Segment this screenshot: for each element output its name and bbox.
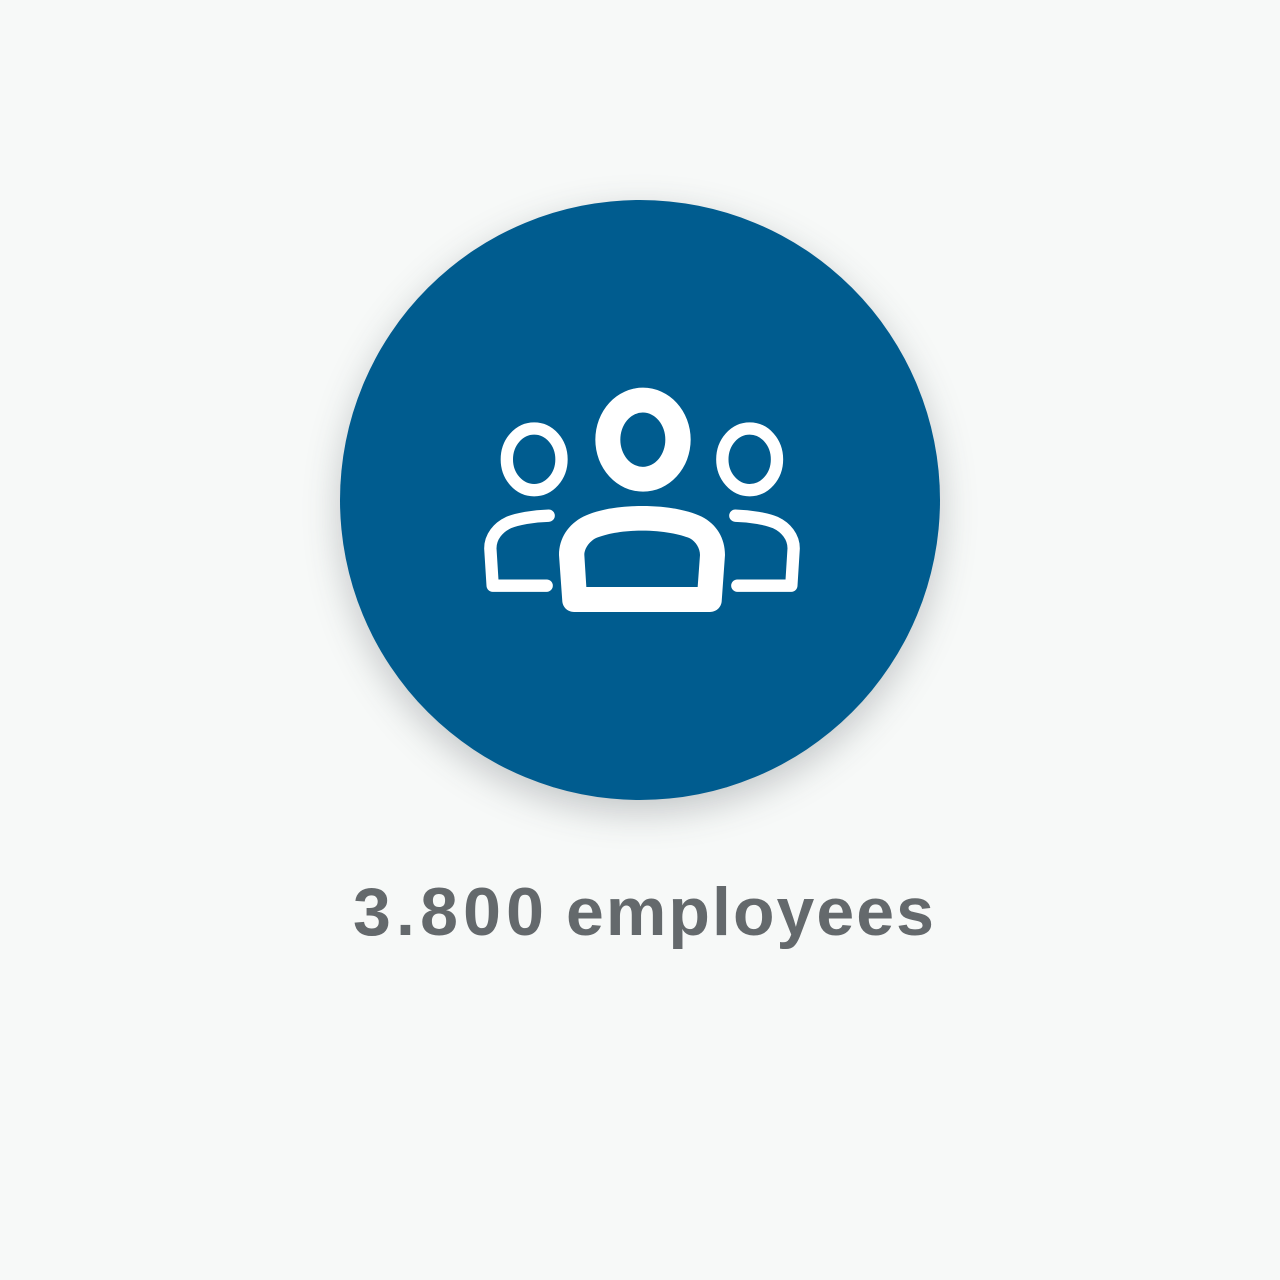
label: employee count: employees xyxy=(566,874,934,950)
icon: centre person head xyxy=(595,388,691,492)
icon: left person head xyxy=(507,428,561,490)
icon: group of three people xyxy=(490,388,794,612)
icon: centre person body xyxy=(559,506,725,612)
label: employee count: 3.800 xyxy=(353,874,544,950)
icon: right person body xyxy=(735,516,794,586)
icon: left person body xyxy=(490,516,549,586)
blue circle background xyxy=(340,200,940,800)
icon: right person head xyxy=(722,428,777,490)
